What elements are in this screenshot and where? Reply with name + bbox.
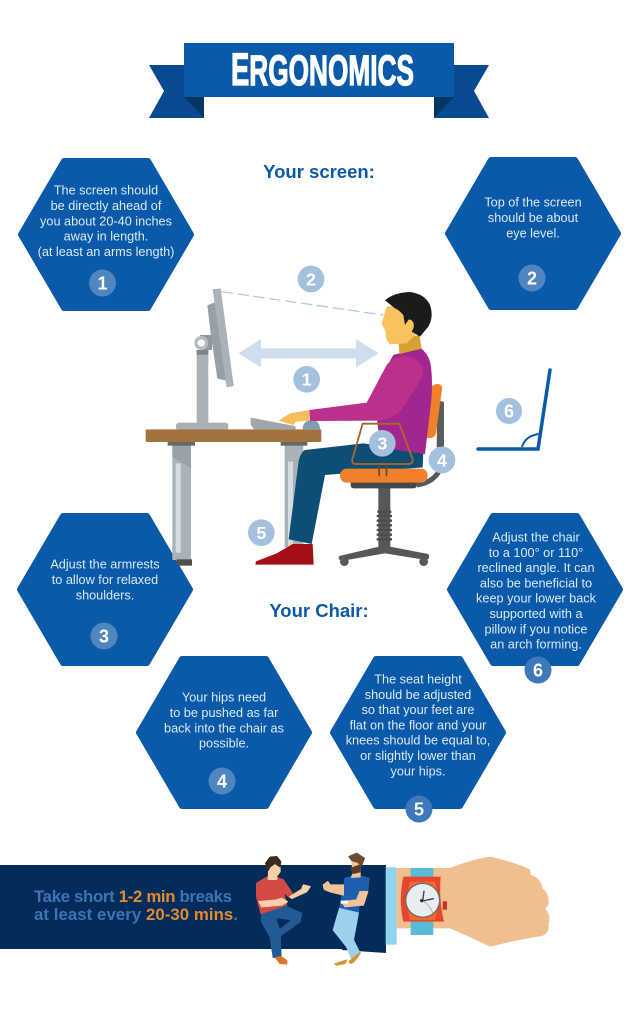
text: tip 2: Top of the screen [484, 196, 582, 210]
panel: tip 1 screen distance [21, 161, 191, 308]
break message: Take short 1-2 min breaks [34, 887, 232, 906]
hair [385, 292, 432, 337]
neck [398, 335, 422, 354]
armrest [352, 424, 413, 476]
marker 2 [298, 266, 324, 292]
text: tip 5: knees should be equal to, [346, 734, 490, 748]
man left [257, 857, 310, 964]
badge 4 [208, 768, 236, 794]
panel: tip 2 screen height [448, 160, 618, 307]
text: tip 3: shoulders. [76, 588, 134, 602]
recline angle diagram [478, 370, 550, 449]
panel: tip 4 hips [139, 659, 309, 806]
dashed sight line [222, 292, 383, 315]
marker 1 [293, 366, 320, 393]
illustration: seated person at desk [146, 266, 455, 566]
marker 3: 3 [377, 434, 387, 454]
badge 2 [518, 264, 546, 292]
shoe [255, 544, 314, 565]
marker 1: 1 [302, 370, 312, 390]
badge 3: 3 [99, 626, 109, 646]
heading: your chair: Your Chair: [269, 600, 369, 621]
text: tip 6: also be beneficial to [480, 576, 592, 590]
marker 2: 2 [306, 269, 316, 289]
monitor [207, 288, 234, 387]
marker 4 [429, 447, 455, 473]
desk [146, 429, 321, 566]
badge 6: 6 [533, 660, 543, 680]
text: tip 3: to allow for relaxed [52, 573, 158, 587]
double arrow: viewing distance [238, 339, 379, 367]
text: tip 5: your hips. [390, 764, 446, 778]
break message line 2: at least every 20-30 mins. [34, 905, 238, 924]
keyboard [251, 418, 296, 429]
title banner [149, 43, 489, 118]
text: tip 6: reclined angle. It can [477, 561, 595, 575]
face [382, 303, 417, 344]
panel: tip 6 recline [450, 516, 620, 684]
text: tip 1: (at least an arms length) [38, 245, 174, 259]
badge 3 [90, 622, 118, 650]
text: tip 6: keep your lower back [476, 592, 597, 606]
heading: your screen: Your screen: [263, 161, 375, 182]
marker 5: 5 [256, 523, 266, 543]
badge 5: 5 [414, 800, 424, 820]
illustration: wrist with watch [386, 857, 549, 947]
text: tip 2: eye level. [506, 226, 560, 240]
text: tip 1: The screen should [54, 184, 158, 198]
mouse [303, 420, 320, 429]
text: tip 2: should be about [488, 211, 579, 225]
torso [377, 347, 432, 454]
marker 3 [369, 430, 396, 457]
trousers [289, 443, 423, 544]
chair seat [340, 469, 428, 483]
text: tip 5: should be adjusted [365, 688, 471, 702]
text: tip 4: possible. [199, 737, 249, 751]
badge 4: 4 [217, 772, 227, 792]
marker 5 [248, 519, 275, 546]
hand [397, 857, 549, 947]
marker 4: 4 [437, 450, 447, 470]
text: tip 5: flat on the floor and your [350, 718, 487, 732]
text: tip 4: Your hips need [182, 690, 266, 704]
chair [339, 384, 444, 566]
text: tip 5: or slightly lower than [360, 749, 476, 763]
badge 1 [89, 270, 116, 296]
text: tip 6: to a 100° or 110° [489, 546, 583, 560]
text: tip 6: supported with a [489, 607, 583, 621]
text: tip 4: to be pushed as far [170, 706, 279, 720]
text: tip 6: Adjust the chair [492, 530, 580, 544]
hand [278, 410, 309, 425]
text: tip 1: you about 20-40 inches [40, 214, 172, 228]
text: tip 6: an arch forming. [490, 638, 582, 652]
badge 1: 1 [97, 274, 108, 294]
text: tip 3: Adjust the armrests [50, 558, 160, 572]
text: tip 5: so that your feet are [362, 703, 474, 717]
marker 6: 6 [504, 402, 514, 422]
illustration: two men talking [257, 853, 369, 965]
watch [401, 868, 447, 935]
panel: tip 5 seat height [333, 659, 503, 822]
badge 2: 2 [527, 268, 537, 288]
title text: ERGONOMICS [231, 44, 414, 95]
text: tip 1: be directly ahead of [51, 199, 162, 213]
badge 5 [406, 796, 432, 822]
shirt cuff [386, 867, 397, 945]
man right [323, 853, 369, 965]
panel: tip 3 armrests [20, 516, 190, 663]
text: tip 4: back into the chair as [164, 721, 284, 735]
badge 6 [524, 656, 552, 684]
monitor stand [176, 335, 228, 431]
text: tip 1: away in length. [64, 230, 148, 244]
forearm and upper arm [309, 356, 423, 421]
text: tip 5: The seat height [374, 672, 462, 686]
text: tip 6: pillow if you notice [485, 622, 587, 636]
break banner [0, 865, 386, 953]
